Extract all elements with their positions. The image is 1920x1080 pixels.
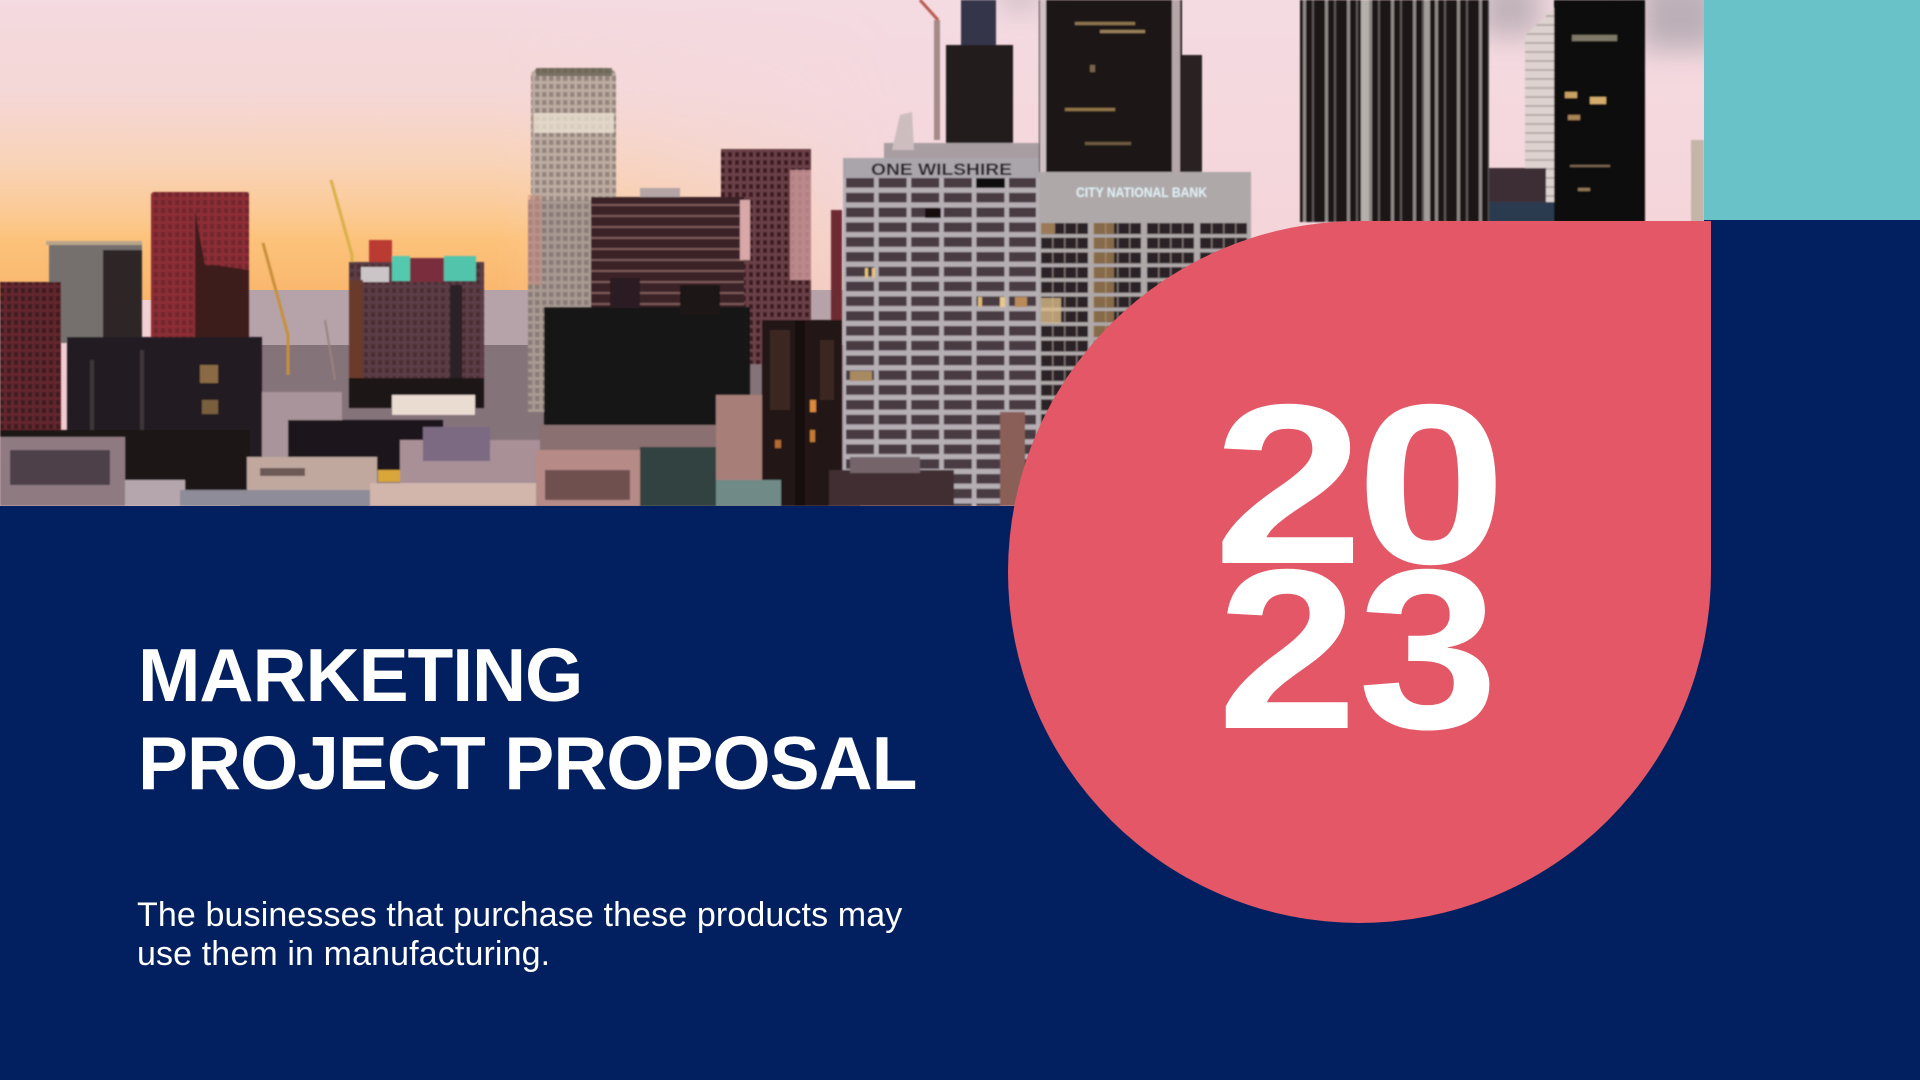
title: PROJECT PROPOSAL (138, 721, 916, 805)
construction tower and crane (920, 0, 1013, 145)
mauve building with teal glass (349, 240, 484, 385)
dark block with lights (67, 337, 262, 477)
skyline buildings (0, 0, 1704, 506)
year 2023 (1213, 358, 1499, 777)
sky (0, 0, 1720, 506)
coral drop shape (1008, 221, 1711, 923)
subtitle (137, 896, 902, 973)
red tower (151, 192, 249, 345)
rooftop equipment (884, 112, 1039, 159)
photo: city skyline at sunset (0, 0, 1704, 506)
distant mountains (240, 290, 860, 506)
year line: 23: 23 (1216, 523, 1498, 777)
subtitle: The businesses that purchase these products may (137, 896, 902, 934)
yellow cranes (263, 180, 352, 380)
sliver at photo edge (1691, 140, 1704, 222)
subtitle: use them in manufacturing. (137, 935, 550, 973)
dark base with lit podium (349, 378, 484, 415)
right brick tower (721, 149, 811, 364)
far right striped tower (1300, 0, 1489, 222)
teal corner block (1704, 0, 1920, 220)
title (138, 633, 916, 805)
maroon building at left (0, 282, 61, 442)
brown banded high-rise (591, 188, 750, 317)
City National Bank building (1039, 172, 1251, 462)
One Wilshire building (843, 158, 1039, 506)
lower rooftops (0, 392, 781, 506)
small dark annex (1489, 168, 1569, 222)
dark glass tower (1039, 0, 1202, 175)
black tower (1554, 0, 1645, 222)
year line: 20: 20 (1213, 358, 1499, 612)
round top tower (528, 68, 617, 412)
red sliver (831, 210, 842, 320)
pale tower (1525, 8, 1554, 205)
foreground brown rooftop (829, 412, 1025, 506)
dark foreground block (544, 278, 750, 429)
One Wilshire building: ONE WILSHIRE (871, 160, 1012, 179)
title: MARKETING (138, 633, 582, 717)
City National Bank building: CITY NATIONAL BANK (1076, 185, 1207, 200)
dark mid structures with orange lights (762, 320, 842, 506)
grey-green tower (46, 241, 142, 345)
